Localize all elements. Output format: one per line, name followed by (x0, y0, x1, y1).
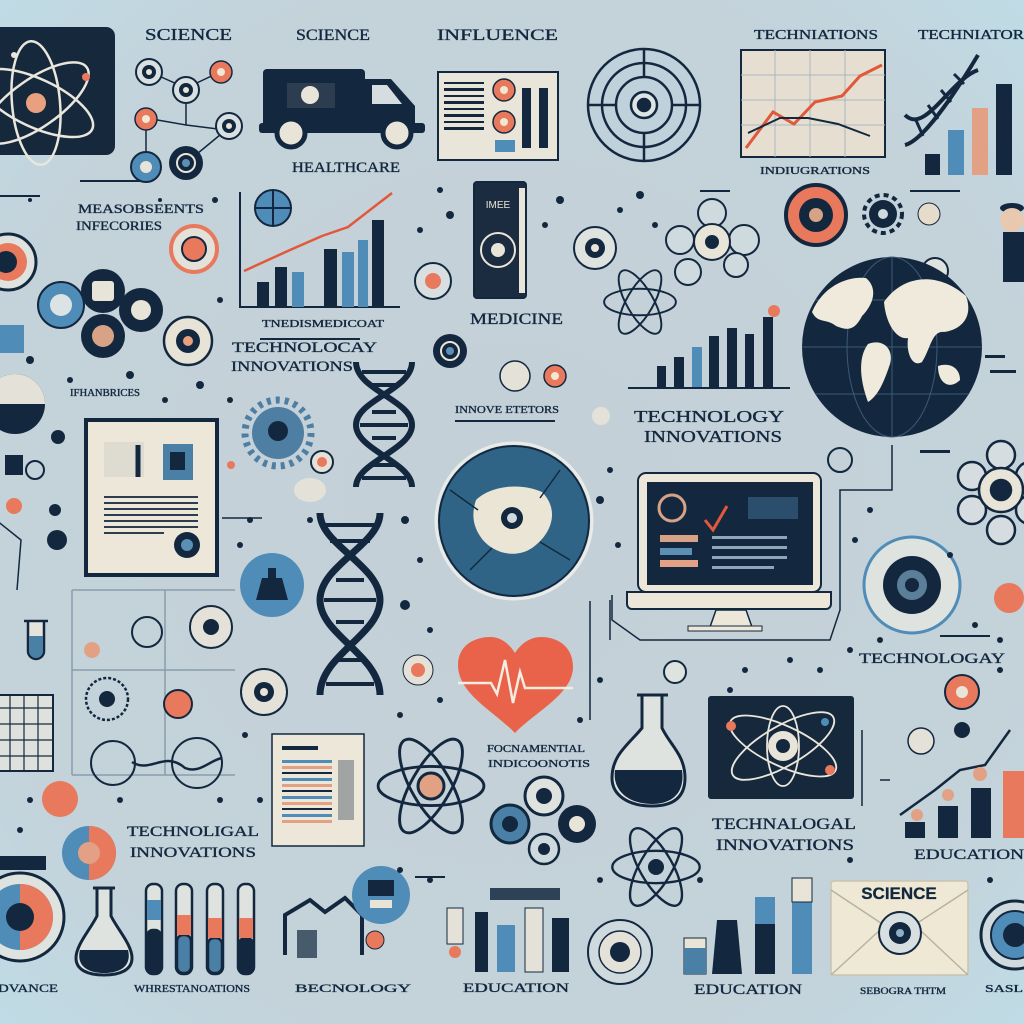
bar chart with trend (240, 192, 400, 307)
caption: foundational: FOCNAMENTIAL (487, 744, 585, 755)
bar chart: education (684, 878, 812, 974)
heading: technological innovations left: INNOVATIONS (130, 845, 256, 861)
icon: atom bottom right (612, 821, 700, 913)
icon: atom bottom centre-left (378, 730, 484, 842)
caption: bottom labels: SEBOGRA THTM (860, 986, 946, 996)
cluster: medallions bottom centre (491, 777, 596, 864)
panel: data table (272, 734, 364, 846)
icon network: science (131, 59, 242, 182)
heading: influence: INFLUENCE (437, 27, 558, 44)
book: medicine cover: IMEE (486, 200, 511, 211)
icon: left lens (0, 856, 64, 961)
heart with pulse (458, 637, 573, 733)
scattered small icons (0, 180, 1016, 883)
icon: mountain chart with medallion (285, 866, 410, 958)
icon: delivery truck (259, 69, 425, 147)
heading: technological innovations left (127, 824, 259, 861)
icon: wired dial (415, 227, 616, 299)
book: medicine cover (474, 182, 526, 298)
bar chart right with line (862, 728, 1024, 838)
heading: measurements: INFECORIES (76, 218, 162, 233)
icon: medal blue (240, 553, 304, 617)
bar chart: centre right (628, 305, 790, 388)
heading: technological innovations left: TECHNOLIGAL (127, 824, 259, 840)
caption: indonesia: IFHANBRICES (70, 388, 140, 399)
flask bottom left (76, 888, 132, 975)
icon: half circle left (0, 374, 45, 434)
caption: foundational: INDICOONOTIS (488, 758, 590, 770)
icon: medallions (433, 334, 610, 425)
icon: orange dot right (994, 583, 1024, 613)
book chart (438, 72, 558, 160)
heading: technology innovations: INNOVATIONS (231, 359, 353, 375)
heading: science 2: SCIENCE (296, 27, 370, 44)
heading: technological innovations right: INNOVATIONS (716, 837, 854, 854)
icon: bottom ring (588, 920, 652, 984)
heading: medicine: MEDICINE (470, 311, 563, 328)
heading: technology innovations 2: TECHNOLOGY (634, 407, 784, 426)
caption: foundational (487, 744, 590, 770)
heading: technological innovations right: TECHNALOGAL (712, 816, 856, 833)
icon: right flower (958, 441, 1024, 544)
icon: atom mid top (604, 264, 676, 340)
heading: techniations: TECHNIATIONS (754, 28, 878, 43)
icon: orange dial (171, 226, 217, 272)
heading: technology right: TECHNOLOGAY (859, 651, 1005, 667)
icon: gear (864, 195, 902, 233)
test tubes row (146, 884, 254, 974)
heading: science 1: SCIENCE (145, 25, 232, 44)
heading: technological innovations right (712, 816, 856, 854)
icon: orange eye dial (786, 185, 846, 245)
test tube left (0, 498, 67, 659)
icon: target dial (588, 49, 700, 161)
caption: indications: INDIUGRATIONS (760, 166, 870, 177)
icon: large lens dial (864, 537, 960, 633)
caption: bottom labels (0, 980, 1023, 998)
heading: technology innovations 2: INNOVATIONS (644, 427, 782, 446)
envelope: science: SCIENCE (861, 884, 937, 903)
panel: report document (86, 420, 217, 575)
icon: flower network (666, 199, 759, 285)
icon: ring medallion (164, 317, 212, 365)
line chart panel (741, 50, 885, 157)
envelope: science (831, 881, 968, 975)
icon: globe small (255, 190, 291, 226)
table left (0, 695, 53, 771)
heading: technology innovations 2 (634, 407, 784, 446)
heading: technology innovations: TECHNOLOCAY (232, 340, 377, 356)
dna and bars (905, 55, 1012, 175)
icon: orange hexagon right (945, 675, 979, 738)
heading: measurements: MEASOBSEENTS (78, 201, 204, 216)
globe (802, 257, 982, 437)
icon: small orange tag (403, 655, 686, 685)
icon cluster: three circles (38, 269, 163, 358)
caption: bottom labels: EDUCATION (694, 982, 802, 998)
dna lower (320, 513, 380, 695)
caption: bottom labels: SASL (985, 984, 1023, 995)
caption: bottom labels: BECNOLOGY (295, 981, 412, 995)
icon: person right (918, 203, 1024, 284)
icon: gear network (245, 400, 311, 466)
icon: right lens (981, 901, 1024, 969)
icon: orange circle left (42, 781, 116, 880)
laptop (627, 473, 831, 631)
icon: half ring left (0, 234, 36, 290)
panel: atom top left (0, 27, 115, 167)
panel: quadrant diagram (72, 590, 235, 788)
medallion: world brain (436, 443, 592, 599)
panel: atom dark (708, 696, 854, 799)
flask center (612, 695, 685, 806)
caption: bottom labels: EDUCATION (463, 980, 570, 995)
icon: orange small dial (227, 451, 333, 502)
dna upper (356, 362, 412, 487)
heading: education right: EDUCATION (914, 847, 1024, 863)
heading: technator: TECHNIATOR (918, 28, 1024, 43)
caption: measurement: TNEDISMEDICOAT (262, 319, 384, 330)
caption: bottom labels: WHRESTANOATIONS (134, 984, 250, 995)
panel: education buildings (447, 888, 569, 972)
connector lines (222, 445, 892, 720)
caption: innovative: INNOVE ETETORS (455, 404, 559, 416)
heading: technology innovations (231, 340, 377, 375)
heading: measurements (76, 201, 204, 233)
heading: healthcare: HEALTHCARE (292, 160, 400, 176)
icon: dial on stand (241, 669, 287, 715)
